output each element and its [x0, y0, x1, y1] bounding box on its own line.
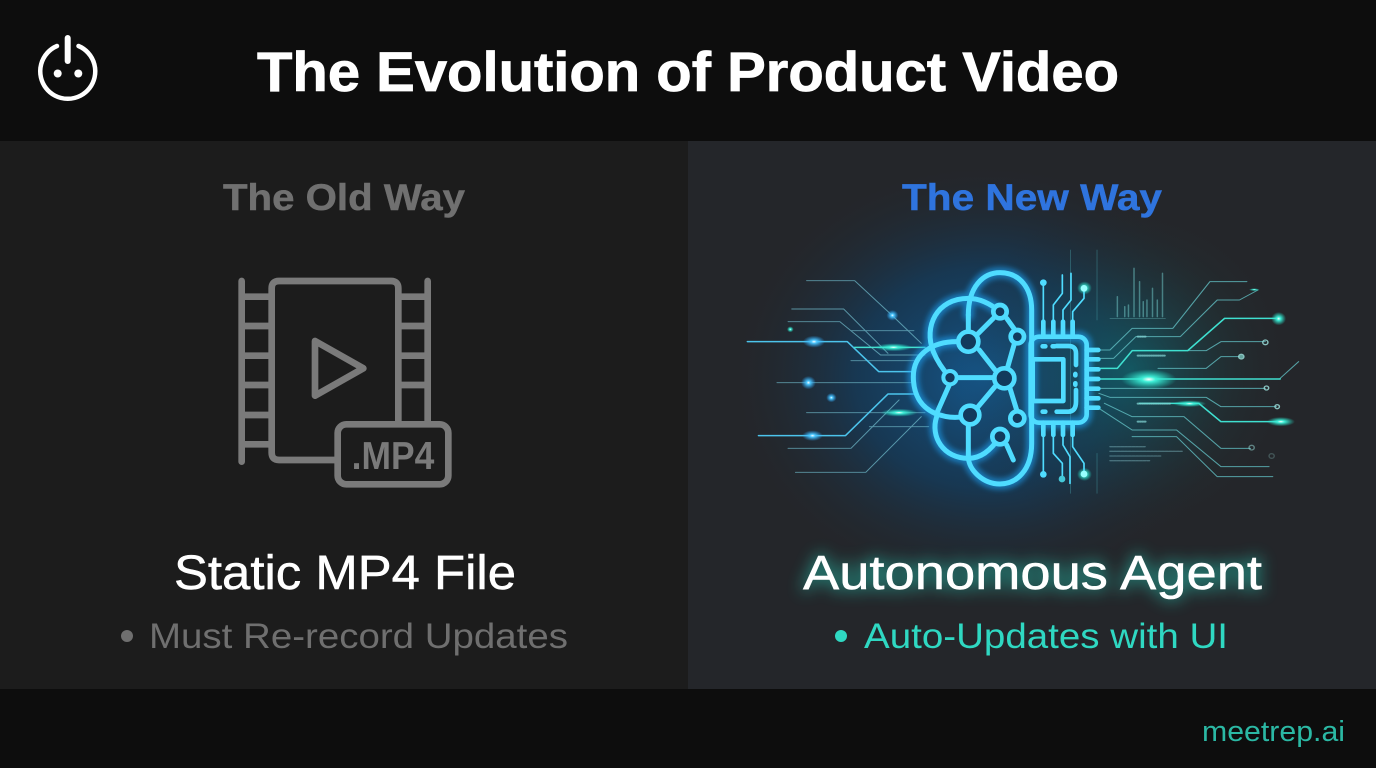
label: static mp4 file: Static MP4 File — [174, 547, 516, 600]
left traces — [777, 281, 929, 472]
brain nodes — [943, 305, 1024, 444]
right traces — [1099, 282, 1299, 477]
light spots — [787, 281, 1295, 481]
circuit traces — [747, 250, 1299, 493]
panel: the new way — [688, 141, 1376, 689]
footer bar — [0, 689, 1376, 768]
panel: the old way — [0, 141, 688, 689]
bullet: must re-record updates: Must Re-record Updates — [149, 617, 568, 656]
label: autonomous agent: Autonomous Agent — [803, 547, 1262, 600]
micro text blocks — [1138, 337, 1170, 422]
header bar — [0, 0, 1376, 141]
brand: meetrep.ai: meetrep.ai — [1202, 716, 1345, 748]
brain strokes — [913, 273, 1032, 484]
label: autonomous agent: Autonomous Agent — [803, 547, 1262, 600]
glow background behind brain — [725, 157, 1300, 599]
chip — [1031, 322, 1098, 435]
icon: glowing brain and chip — [913, 273, 1098, 484]
title: The Evolution of Product Video — [257, 40, 1119, 103]
vertical traces behind chart — [1070, 250, 1097, 493]
heading: the new way: The New Way — [902, 177, 1162, 218]
outer glow — [913, 273, 1087, 484]
bullet: auto-updates with ui: Auto-Updates with UI — [864, 617, 1228, 656]
icon: film strip with mp4 badge: .MP4 — [352, 434, 434, 478]
chip leads — [1043, 273, 1084, 483]
mini bar chart — [1110, 268, 1165, 319]
end nodes — [1239, 340, 1279, 458]
icon: power symbol logo — [40, 38, 95, 99]
heading: the old way: The Old Way — [223, 177, 465, 218]
icon: film strip with mp4 badge — [242, 281, 448, 484]
